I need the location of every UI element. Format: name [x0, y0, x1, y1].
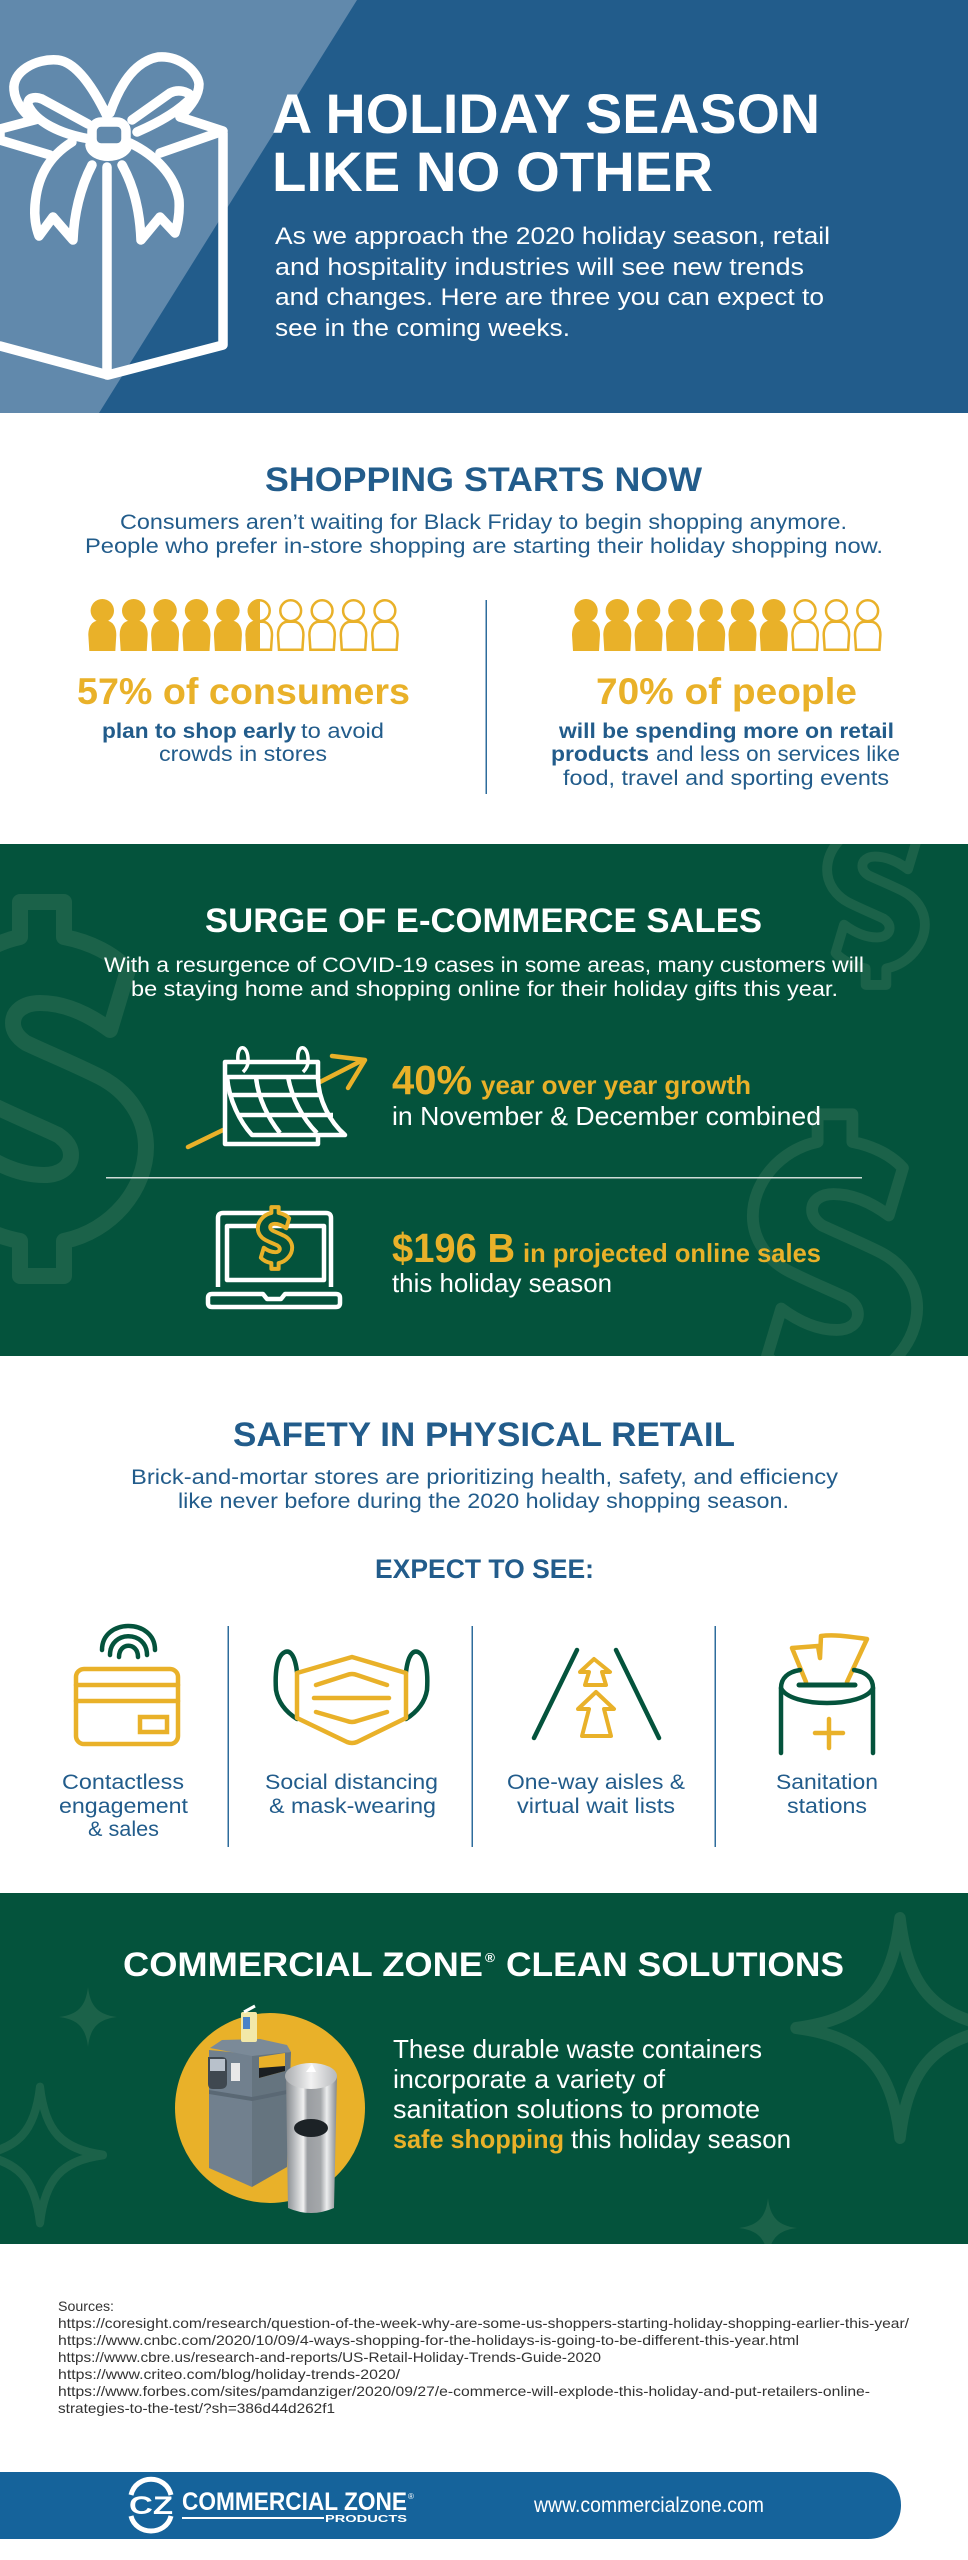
label: & mask-wearing: [269, 1795, 436, 1818]
panel: header: [0, 0, 968, 413]
stat: 70 percent: products: [551, 743, 649, 766]
icon: laptop with dollar: [208, 1207, 340, 1307]
stat: 70 percent: and less on services like: [656, 743, 900, 766]
intro text: [131, 1466, 839, 1513]
label: stations: [787, 1795, 867, 1818]
description text: incorporate a variety of: [393, 2064, 666, 2094]
intro text: Brick-and-mortar stores are prioritizing health, safety, and efficiency: [131, 1466, 839, 1489]
intro text: see in the coming weeks.: [275, 315, 570, 342]
sources: https://www.forbes.com/sites/pamdanziger/2020/09/27/e-commerce-will-explode-this-holiday-and-put-retailers-online-: [58, 2383, 870, 2399]
heading: ®: [485, 1950, 495, 1965]
stat: 196 billion: $196 B: [392, 1225, 515, 1271]
intro text: and changes. Here are three you can expect to: [275, 284, 824, 311]
sources: strategies-to-the-test/?sh=386d44d262f1: [58, 2400, 335, 2416]
label: Contactless: [62, 1771, 184, 1794]
chart: 70 percent people pictogram: [572, 599, 880, 651]
panel: shopping starts now: [77, 461, 900, 794]
description text: sanitation solutions to promote: [393, 2094, 760, 2124]
icon: sanitation station: [781, 1635, 873, 1753]
heading: SAFETY IN PHYSICAL RETAIL: [233, 1416, 735, 1454]
panel: e-commerce sales: [0, 844, 968, 1356]
label: & sales: [88, 1818, 159, 1841]
description text: this holiday season: [571, 2124, 791, 2154]
icon: contactless card: [76, 1626, 178, 1744]
label: [59, 1771, 188, 1841]
label: One-way aisles &: [507, 1771, 685, 1794]
title: LIKE NO OTHER: [272, 140, 713, 203]
label: virtual wait lists: [517, 1795, 675, 1818]
icon: one-way aisle: [534, 1650, 659, 1738]
sources: Sources:: [58, 2298, 114, 2314]
heading: CLEAN SOLUTIONS: [506, 1946, 844, 1984]
intro text: As we approach the 2020 holiday season, retail: [275, 223, 830, 250]
label: Sanitation: [776, 1771, 878, 1794]
description text: [393, 2034, 791, 2154]
heading: COMMERCIAL ZONE: [123, 1946, 483, 1984]
stat: 196 billion: this holiday season: [392, 1268, 612, 1298]
stat: 196 billion: in projected online sales: [523, 1238, 821, 1268]
intro text: and hospitality industries will see new trends: [275, 254, 804, 281]
stat: 40 percent growth: year over year growth: [481, 1070, 751, 1100]
intro text: [104, 954, 864, 1001]
grey bin: [208, 2006, 291, 2187]
intro text: be staying home and shopping online for their holiday gifts this year.: [131, 978, 838, 1001]
icon: calendar with growth arrow: [188, 1048, 365, 1147]
stat: 40 percent growth: 40%: [392, 1057, 472, 1103]
icon: face mask: [276, 1652, 427, 1743]
intro text: With a resurgence of COVID-19 cases in some areas, many customers will: [104, 954, 864, 977]
panel: safety in physical retail: [59, 1416, 878, 1847]
stat: 40 percent growth: in November & December combined: [392, 1101, 821, 1131]
heading: SHOPPING STARTS NOW: [265, 461, 703, 499]
description text: These durable waste containers: [393, 2034, 762, 2064]
logo: ®: [408, 2492, 414, 2501]
footer bar: [0, 2472, 901, 2539]
stat: 70 percent: food, travel and sporting events: [563, 767, 889, 790]
intro text: Consumers aren’t waiting for Black Friday to begin shopping anymore.: [120, 511, 847, 534]
steel canister: [285, 2063, 337, 2213]
label: [776, 1771, 878, 1818]
intro text: like never before during the 2020 holiday shopping season.: [178, 1490, 789, 1513]
website: www.commercialzone.com: [533, 2494, 764, 2517]
image: waste containers on yellow circle: [175, 2006, 365, 2213]
description text: safe shopping: [393, 2124, 564, 2154]
label: [507, 1771, 685, 1818]
stat: 57 percent: [77, 671, 410, 766]
title: A HOLIDAY SEASON: [272, 82, 820, 145]
panel: clean solutions: [0, 1893, 968, 2258]
sources: https://www.cbre.us/research-and-reports/US-Retail-Holiday-Trends-Guide-2020: [58, 2349, 601, 2365]
intro text: People who prefer in-store shopping are starting their holiday shopping now.: [85, 535, 883, 558]
stat: 70 percent: [551, 671, 900, 790]
logo: PRODUCTS: [325, 2513, 407, 2525]
logo: [129, 2479, 414, 2531]
sources: [58, 2298, 909, 2416]
title: [272, 82, 820, 203]
stat: 40 percent growth: [392, 1057, 821, 1131]
label: engagement: [59, 1795, 188, 1818]
subheading: EXPECT TO SEE:: [375, 1554, 594, 1584]
intro text: [275, 223, 830, 342]
label: Social distancing: [265, 1771, 438, 1794]
heading: SURGE OF E-COMMERCE SALES: [205, 902, 762, 940]
stat: 70 percent: will be spending more on retail: [558, 720, 894, 743]
stat: 70 percent: 70% of people: [596, 671, 857, 712]
stat: 196 billion: [392, 1225, 821, 1298]
sources: https://coresight.com/research/question-of-the-week-why-are-some-us-shoppers-starting-holiday-shopping-earlier-this-year/: [58, 2315, 909, 2331]
logo: CZ: [129, 2492, 173, 2520]
intro text: [85, 511, 883, 558]
logo: COMMERCIAL ZONE: [182, 2488, 407, 2516]
stat: 57 percent: to avoid: [301, 720, 384, 743]
stat: 57 percent: plan to shop early: [102, 720, 296, 743]
sources: https://www.criteo.com/blog/holiday-trends-2020/: [58, 2366, 400, 2382]
sources: https://www.cnbc.com/2020/10/09/4-ways-shopping-for-the-holidays-is-going-to-be-different-this-year.html: [58, 2332, 799, 2348]
heading: [123, 1946, 844, 1984]
chart: 57 percent people pictogram: [88, 599, 398, 651]
stat: 57 percent: crowds in stores: [159, 743, 327, 766]
label: [265, 1771, 438, 1818]
icon: gift box: [0, 57, 223, 375]
stat: 57 percent: 57% of consumers: [77, 671, 410, 712]
